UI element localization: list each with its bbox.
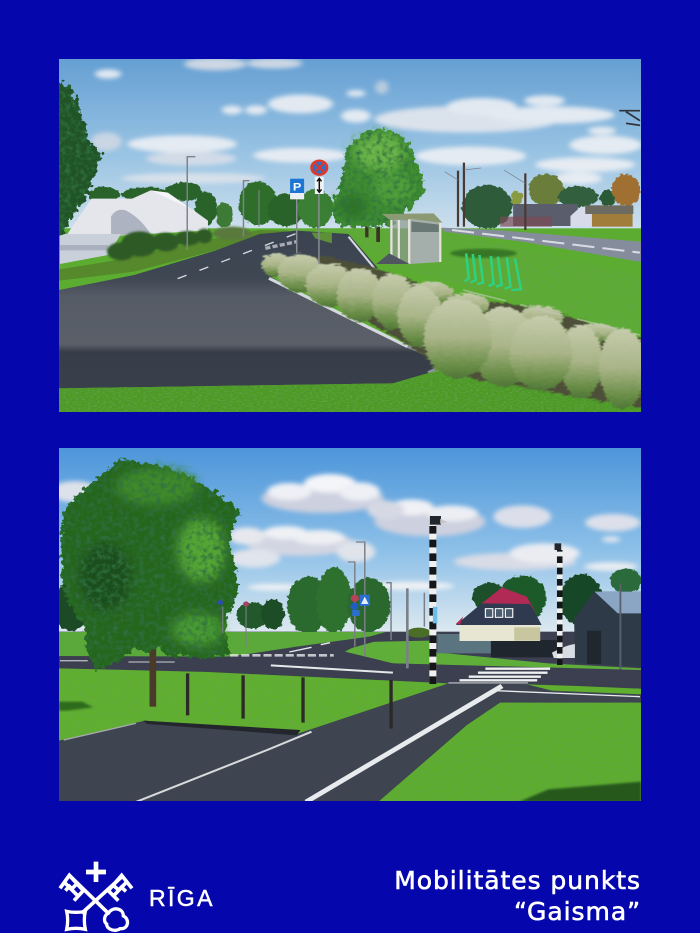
- ground base: [59, 632, 641, 802]
- foreground left grass: [59, 668, 448, 741]
- path markings: [64, 686, 640, 802]
- main tree: [331, 128, 424, 242]
- right carriageway: [441, 228, 641, 262]
- title: Mobilitātes punkts Gaisma: “Gaisma”: [514, 897, 641, 926]
- striped pole near barn: [555, 543, 561, 665]
- tree shadow on grass: [59, 702, 93, 711]
- traffic signs: [290, 161, 327, 264]
- sky: [59, 59, 641, 246]
- grass shadow: [450, 249, 517, 258]
- title: Mobilitātes punkts Gaisma: Mobilitātes punkts: [394, 866, 641, 895]
- text: RĪGA wordmark: RĪGA: [149, 885, 215, 911]
- icon: right key teeth: [108, 875, 132, 901]
- big tree: [61, 460, 241, 707]
- grass shadow: [519, 782, 641, 802]
- asphalt road crossing: [59, 633, 641, 687]
- narrow grass strip: [527, 684, 641, 694]
- lamp posts and poles: [187, 157, 525, 250]
- sky: [59, 448, 641, 635]
- house with red roof: [456, 587, 542, 641]
- median grass between road branches: [312, 233, 332, 243]
- logo: Riga crossed keys emblem: [58, 862, 134, 932]
- curb shadow: [143, 721, 300, 735]
- panel: bottom rendering of intersection with crossing and striped poles: [59, 448, 641, 801]
- icon: clover key bow: [105, 909, 127, 930]
- ground base: [59, 228, 641, 412]
- road markings: [60, 643, 393, 673]
- ornamental grass bed: [262, 253, 645, 409]
- panel: top rendering of mobility point with parking road and bus shelter: [59, 59, 641, 412]
- bollards: [188, 673, 391, 729]
- traffic signs: P: [293, 180, 301, 194]
- foreground grass strip: [59, 372, 641, 412]
- zebra crossing: [448, 669, 550, 684]
- icon: square key bow: [67, 911, 85, 929]
- road markings on right carriageway: [452, 230, 640, 253]
- street lamps: [223, 542, 424, 668]
- white building: [60, 190, 208, 264]
- foreground asphalt paths: [59, 683, 641, 802]
- road edge and lane markings: [178, 233, 439, 373]
- bus shelter: [376, 213, 442, 264]
- clouds: [91, 58, 642, 184]
- right grass: [378, 703, 641, 802]
- title: Mobilitātes punkts Gaisma: [394, 866, 641, 926]
- striped pole near crossing: [430, 516, 448, 684]
- overhead wire bracket: [619, 111, 640, 125]
- fence: [437, 634, 491, 653]
- icon: left key teeth: [60, 875, 83, 901]
- background trees: [53, 567, 641, 633]
- asphalt road: [59, 231, 442, 388]
- distant tree line: [89, 174, 640, 228]
- left tree: [49, 80, 103, 235]
- distant buildings on the right: [500, 204, 633, 227]
- icon: crossed keys shafts: [69, 875, 123, 913]
- grass far and left verge: [59, 228, 640, 333]
- scooters: [465, 253, 521, 290]
- low hedge: [407, 628, 431, 638]
- barn: [552, 583, 641, 673]
- pale path through grass: [463, 290, 640, 335]
- far grass: [59, 632, 386, 657]
- road signs: [217, 595, 370, 616]
- icon: cross: [86, 862, 106, 882]
- clouds: [51, 474, 641, 591]
- bushes: [107, 227, 251, 260]
